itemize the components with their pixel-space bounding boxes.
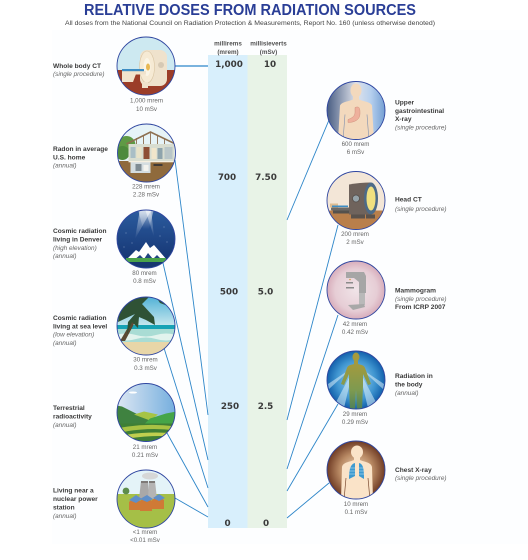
connector lines — [163, 66, 338, 518]
source: mammogram: (single procedure) — [395, 296, 447, 303]
source: nuclear power station: <1 mrem — [133, 529, 157, 536]
source: cosmic radiation sea level: living at sea level — [53, 323, 107, 330]
source: cosmic radiation Denver: 80 mrem — [132, 270, 157, 277]
column: millirems scale: 250 — [221, 402, 239, 412]
column: millirems scale: 500 — [220, 288, 238, 298]
source: cosmic radiation sea level — [53, 296, 176, 372]
source: nuclear power station: (annual) — [53, 513, 76, 520]
column: millisieverts scale: 2.5 — [258, 402, 273, 412]
source: nuclear power station — [53, 469, 176, 544]
column: millisieverts scale: 0 — [263, 519, 269, 529]
subtitle: All doses from the National Council on Radiation Protection & Measurements, Report No. 160 (unless otherwise denoted) — [65, 20, 435, 27]
source: cosmic radiation sea level: (low elevation) — [53, 332, 94, 339]
source: cosmic radiation Denver — [53, 209, 176, 285]
source: whole body CT: (single procedure) — [53, 71, 105, 78]
source: mammogram: 0.42 mSv — [342, 329, 369, 336]
source: head CT: (single procedure) — [395, 206, 447, 213]
source: radon: (annual) — [53, 162, 76, 170]
source: cosmic radiation Denver: (annual) — [53, 253, 76, 260]
source: head CT: Head CT — [395, 196, 422, 204]
source: radon: 228 mrem — [132, 184, 160, 190]
source: terrestrial radioactivity: 0.21 mSv — [132, 452, 159, 459]
column: millisieverts scale: 10 — [264, 60, 276, 70]
source: mammogram: From ICRP 2007 — [395, 304, 446, 311]
source: upper GI x-ray: (single procedure) — [395, 124, 447, 132]
icon: mammography machine — [326, 260, 386, 320]
source: terrestrial radioactivity: (annual) — [53, 422, 76, 429]
icon: palm beach — [116, 296, 176, 356]
source: whole body CT — [53, 36, 176, 113]
source: terrestrial radioactivity: 21 mrem — [133, 444, 157, 451]
source: cosmic radiation Denver: (high elevation) — [53, 245, 97, 252]
source: radon: Radon in average — [53, 146, 108, 153]
source: terrestrial radioactivity: Terrestrial — [53, 405, 85, 412]
icon: CT scanner — [116, 36, 176, 96]
source: terrestrial radioactivity: radioactivity — [53, 414, 92, 420]
icon: green hills — [116, 382, 176, 442]
source: upper GI x-ray: 600 mrem — [342, 141, 369, 148]
source: upper GI x-ray — [326, 80, 447, 156]
icon: cooling towers and houses — [116, 469, 176, 529]
icon: head CT scanner — [326, 170, 386, 230]
source: radiation in the body: 0.29 mSv — [342, 419, 369, 426]
source: cosmic radiation Denver: Cosmic radiation — [53, 228, 106, 235]
source: cosmic radiation Denver: 0.8 mSv — [133, 278, 157, 285]
source: head CT: 2 mSv — [346, 239, 365, 246]
column: millirems scale: 0 — [224, 519, 231, 529]
source: head CT — [326, 170, 447, 246]
source: cosmic radiation sea level: 30 mrem — [133, 356, 158, 364]
source: radon: U.S. home — [53, 154, 86, 161]
source: upper GI x-ray: Upper — [395, 100, 414, 106]
source: mammogram — [326, 260, 447, 336]
icon: house cross-section — [116, 123, 176, 183]
column: millirems scale — [208, 40, 248, 529]
source: chest x-ray: Chest X-ray — [395, 467, 432, 474]
column: millirems scale: 700 — [218, 173, 236, 183]
source: radiation in the body: (annual) — [395, 390, 418, 397]
source: chest x-ray — [326, 440, 447, 516]
source: chest x-ray: 0.1 mSv — [345, 509, 368, 516]
column: millisieverts scale: millisieverts — [250, 40, 287, 48]
source: nuclear power station: nuclear power — [53, 496, 98, 503]
source: terrestrial radioactivity — [53, 382, 176, 459]
source: cosmic radiation sea level: Cosmic radiation — [53, 315, 106, 322]
column: millisieverts scale — [248, 40, 287, 529]
icon: mountain under rays — [116, 209, 176, 269]
source: whole body CT: 1,000 mrem — [130, 98, 163, 104]
column: millirems scale: (mrem) — [217, 49, 239, 56]
source: mammogram: 42 mrem — [343, 321, 367, 328]
source: upper GI x-ray: gastrointestinal — [395, 108, 444, 115]
source: radiation in the body: the body — [395, 382, 423, 388]
source: cosmic radiation sea level: (annual) — [53, 340, 76, 347]
source: cosmic radiation sea level: 0.3 mSv — [134, 365, 158, 372]
source: upper GI x-ray: 6 mSv — [347, 149, 365, 156]
source: radon: 2.28 mSv — [133, 192, 160, 198]
source: cosmic radiation Denver: living in Denver — [53, 236, 103, 244]
source: nuclear power station: station — [53, 504, 75, 512]
title: RELATIVE DOSES FROM RADIATION SOURCES — [84, 2, 416, 19]
source: chest x-ray: (single procedure) — [395, 475, 447, 482]
icon: glowing human figure — [326, 350, 386, 410]
column: millisieverts scale: 5.0 — [258, 288, 273, 298]
source: radiation in the body: Radiation in — [395, 373, 433, 380]
icon: torso with lungs — [326, 440, 386, 500]
source: nuclear power station: <0.01 mSv — [130, 537, 161, 544]
column: millisieverts scale: 7.50 — [255, 173, 277, 183]
source: whole body CT: 10 mSv — [136, 106, 158, 113]
icon: torso with stomach — [326, 80, 386, 140]
column: millisieverts scale: (mSv) — [260, 49, 277, 56]
source: upper GI x-ray: X-ray — [395, 116, 412, 123]
source: radiation in the body — [326, 350, 433, 426]
source: nuclear power station: Living near a — [53, 488, 94, 494]
source: whole body CT: Whole body CT — [53, 63, 101, 70]
source: mammogram: Mammogram — [395, 288, 436, 294]
source: head CT: 200 mrem — [341, 231, 369, 238]
column: millirems scale: millirems — [214, 40, 242, 48]
source: radiation in the body: 29 mrem — [343, 411, 367, 418]
source: radon — [53, 123, 176, 198]
source: chest x-ray: 10 mrem — [344, 501, 368, 508]
column: millirems scale: 1,000 — [215, 60, 243, 70]
